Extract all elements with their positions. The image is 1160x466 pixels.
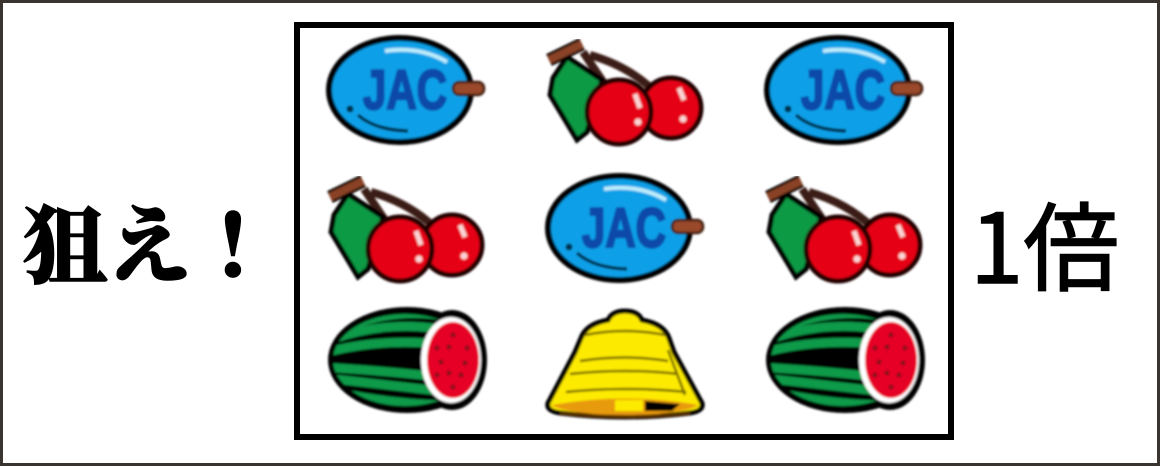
reel frame bbox=[297, 25, 951, 437]
payout label: 1x: 1倍 bbox=[970, 172, 1119, 311]
icon: JAC top right: JAC bbox=[801, 58, 885, 121]
icon: JAC top right bbox=[767, 38, 922, 142]
heading: aim for it: 狙え！ bbox=[23, 180, 275, 301]
icon: cherries middle right bbox=[768, 181, 920, 281]
icon: JAC center: JAC bbox=[582, 196, 666, 259]
reel symbols grid bbox=[320, 38, 925, 417]
icon: JAC top left bbox=[329, 38, 484, 142]
icon: JAC center bbox=[548, 176, 703, 280]
icon: cherries top middle bbox=[549, 44, 701, 144]
icon: bell bottom center bbox=[548, 311, 702, 417]
icon: JAC top left: JAC bbox=[363, 58, 447, 121]
icon: watermelon bottom left bbox=[320, 307, 487, 413]
icon: watermelon bottom right bbox=[758, 307, 925, 413]
icon: cherries middle left bbox=[330, 181, 482, 281]
